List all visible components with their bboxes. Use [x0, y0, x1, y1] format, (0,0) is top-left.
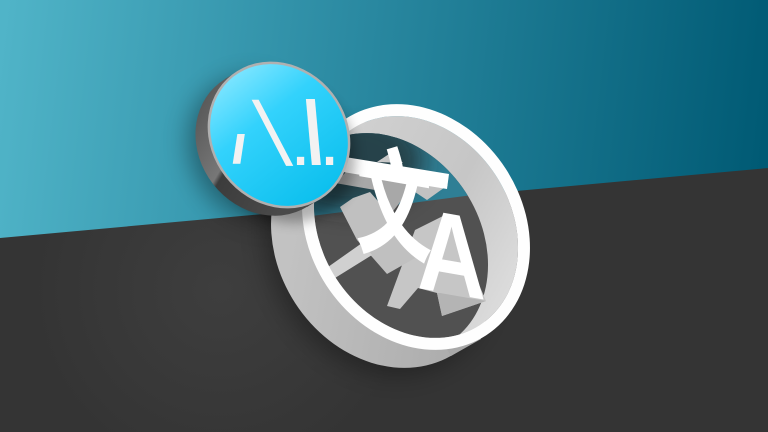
background: teal band [0, 0, 768, 240]
background: dark band [0, 168, 768, 432]
extrusion: character A [387, 215, 486, 316]
translation ring [271, 104, 530, 368]
character: A: A [417, 183, 486, 325]
A.I. badge [166, 33, 380, 244]
shadow: badge on background [159, 49, 357, 251]
character: wen: 文 [356, 105, 432, 289]
extrusion: character wen [328, 152, 448, 278]
shadow: badge on ring [185, 49, 385, 251]
badge lettering A.I.: / [227, 128, 251, 172]
badge face [182, 36, 376, 234]
badge lettering A.I.: . [290, 97, 311, 182]
ring front face [256, 61, 576, 393]
ring inner wall [273, 77, 559, 377]
badge lettering A.I.: I [295, 79, 332, 186]
ring opening floor [314, 133, 488, 338]
badge lettering A.I.: \ [248, 84, 299, 185]
glyph pair: translation symbol [328, 105, 486, 325]
badge lettering A.I.: . [319, 97, 340, 182]
badge rim [178, 33, 380, 237]
ring outer side wall [225, 79, 545, 411]
shadow: ring on background [218, 86, 538, 418]
badge side wall [166, 42, 366, 244]
badge lettering A.I. [227, 79, 340, 186]
